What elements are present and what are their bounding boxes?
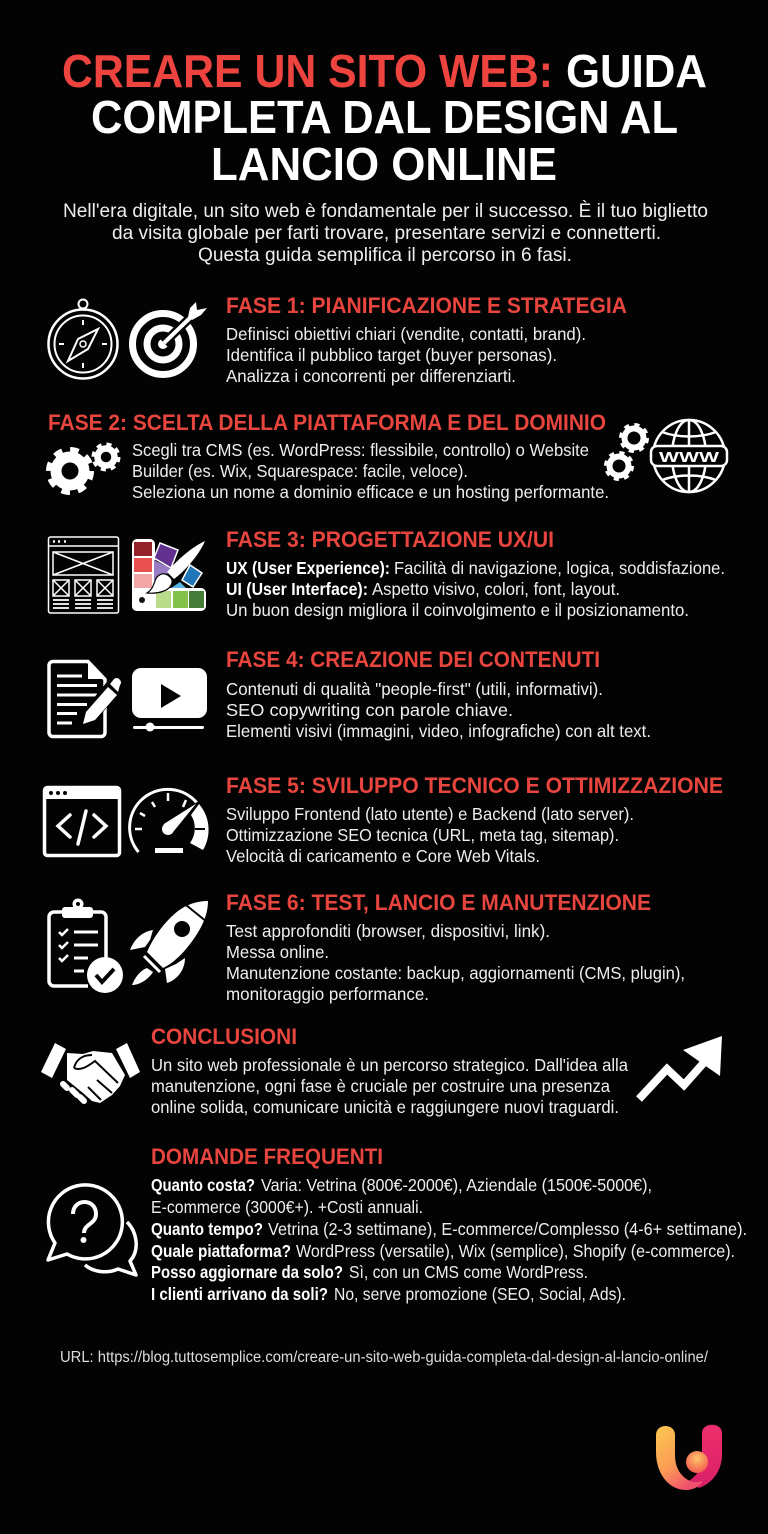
heading: FASE 2: SCELTA DELLA PIATTAFORMA E DEL DOMINIO [48,410,606,435]
panel: fase 5 [44,773,723,866]
icon: gears [49,444,118,492]
body text: No, serve promozione (SEO, Social, Ads). [334,1284,626,1304]
heading: FASE 4: CREAZIONE DEI CONTENUTI [226,647,600,672]
body text: Un sito web professionale è un percorso strategico. Dall'idea alla [151,1055,628,1075]
heading: FASE 6: TEST, LANCIO E MANUTENZIONE [226,890,651,915]
icon: handshake [41,1043,140,1103]
body text: Manutenzione costante: backup, aggiornamenti (CMS, plugin), [226,963,685,983]
heading: CONCLUSIONI [151,1024,297,1049]
body text [226,324,586,386]
body text: Messa online. [226,942,329,962]
icon: rocket [130,901,208,985]
body text: Posso aggiornare da solo? [151,1262,343,1282]
title: COMPLETA DAL DESIGN AL [91,91,678,143]
icon: gears right [606,425,647,479]
title: LANCIO ONLINE [211,138,557,190]
body text: Varia: Vetrina (800€-2000€), Aziendale (1500€-5000€), [261,1175,652,1195]
title: CREARE UN SITO WEB: [62,45,553,97]
body text: manutenzione, ogni fase è cruciale per costruire una presenza [151,1076,610,1096]
body text: Facilità di navigazione, logica, soddisfazione. [394,558,725,578]
body text [151,1055,628,1117]
body text: Scegli tra CMS (es. WordPress: flessibile, controllo) o Website [132,440,589,460]
body text: Contenuti di qualità "people-first" (utili, informativi). [226,679,603,699]
icon: target [132,302,207,374]
body text: Elementi visivi (immagini, video, infografiche) con alt text. [226,721,651,741]
body text: Quale piattaforma? [151,1241,291,1261]
panel: fase 1 [48,293,627,386]
body text: Sì, con un CMS come WordPress. [349,1262,588,1282]
body text [226,921,685,1004]
icon: clipboard [49,898,123,993]
body text: Test approfonditi (browser, dispositivi, link). [226,921,550,941]
body text: Aspetto visivo, colori, font, layout. [372,579,620,599]
body text [226,558,725,620]
body text: Quanto costa? [151,1175,255,1195]
source URL: URL: https://blog.tuttosemplice.com/creare-un-sito-web-guida-completa-dal-design-al-lancio-online/ [60,1349,709,1366]
icon: globe www: WWW [659,449,720,466]
body text: SEO copywriting con parole chiave. [226,700,513,720]
panel: fase 3 [48,527,725,620]
intro text: Nell'era digitale, un sito web è fondamentale per il successo. È il tuo biglietto [63,199,708,222]
body text: Quanto tempo? [151,1219,263,1239]
panel: domande frequenti [48,1144,747,1304]
panel: conclusioni [41,1024,722,1117]
panel: fase 4 [49,647,651,741]
body text: I clienti arrivano da soli? [151,1284,328,1304]
intro text [63,199,708,266]
icon: growth arrow [639,1036,722,1099]
icon: globe www [651,420,727,492]
heading: FASE 3: PROGETTAZIONE UX/UI [226,527,554,552]
body text [151,1175,747,1304]
body text [226,804,634,866]
heading: DOMANDE FREQUENTI [151,1144,383,1169]
body text: Ottimizzazione SEO tecnica (URL, meta tag, sitemap). [226,825,619,845]
body text: Definisci obiettivi chiari (vendite, contatti, brand). [226,324,586,344]
heading: FASE 1: PIANIFICAZIONE E STRATEGIA [226,293,627,318]
body text: WordPress (versatile), Wix (semplice), Shopify (e-commerce). [296,1241,735,1261]
body text: UX (User Experience): [226,558,390,578]
body text: Analizza i concorrenti per differenziarti. [226,366,516,386]
icon: speedometer [130,789,209,852]
body text: Sviluppo Frontend (lato utente) e Backend (lato server). [226,804,634,824]
body text [226,679,651,741]
body text: Seleziona un nome a dominio efficace e un hosting performante. [132,482,609,502]
body text: E-commerce (3000€+). +Costi annuali. [151,1197,423,1217]
icon: document and pen [49,661,121,736]
body text: Identifica il pubblico target (buyer personas). [226,345,557,365]
body text: online solida, comunicare unicità e raggiungere nuovi traguardi. [151,1097,619,1117]
icon: colour palette and brush [132,539,206,611]
logo [656,1425,722,1490]
icon: video player [132,668,207,732]
icon: wireframe [48,537,118,613]
body text: UI (User Interface): [226,579,368,599]
panel: fase 2 [48,410,727,502]
intro text: Questa guida semplifica il percorso in 6 fasi. [198,244,572,266]
heading: FASE 5: SVILUPPO TECNICO E OTTIMIZZAZIONE [226,773,723,798]
body text: Velocità di caricamento e Core Web Vitals. [226,846,540,866]
panel: fase 6 [49,890,685,1004]
body text: monitoraggio performance. [226,984,429,1004]
title: GUIDA [566,45,707,97]
body text: Un buon design migliora il coinvolgimento e il posizionamento. [226,600,689,620]
title [62,45,707,190]
icon: code window [44,787,120,856]
body text [132,440,609,502]
icon: compass [48,300,118,378]
body text: Builder (es. Wix, Squarespace: facile, veloce). [132,461,468,481]
icon: question bubbles [48,1185,136,1275]
intro text: da visita globale per farti trovare, presentare servizi e connetterti. [112,222,661,244]
